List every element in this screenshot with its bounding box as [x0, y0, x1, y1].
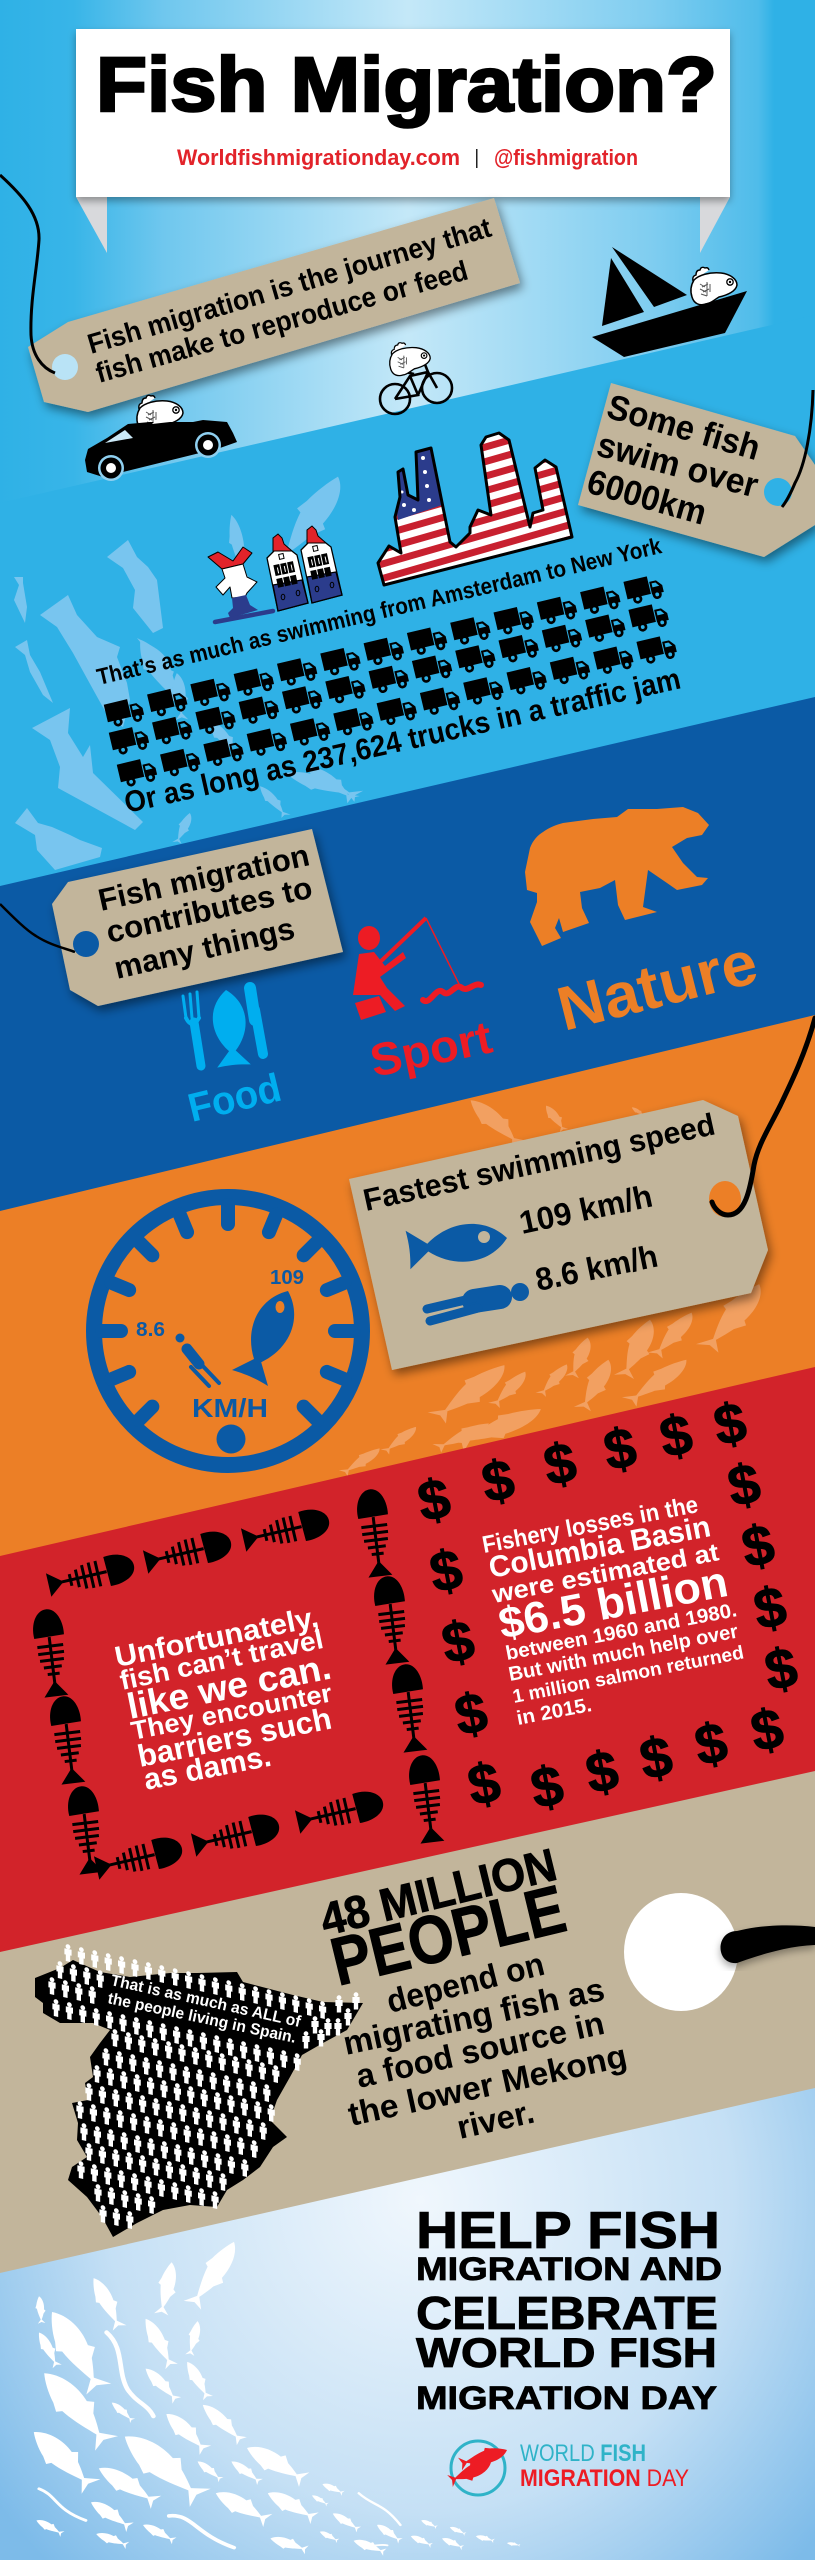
logo: World Fish Migration Day: WORLD FISH [520, 2440, 646, 2467]
text block: barriers such as dams: like we can. [123, 1646, 334, 1727]
dollar signs frame: $ [749, 1574, 791, 1641]
gauge value 8.6: 8.6 [136, 1319, 165, 1341]
icon: Amsterdam canal house 2 [301, 526, 342, 603]
icon: fish in sailboat [592, 247, 747, 357]
icon: food fork fish knife [183, 988, 263, 1068]
tag: what is fish migration: fish make to reproduce or feed [92, 255, 471, 389]
panel: dark blue band [0, 697, 815, 2560]
text block: 48 million people: river. [453, 2093, 538, 2146]
background fish school orange [338, 1095, 775, 1477]
title banner [76, 29, 730, 197]
text block: 48 million people: PEOPLE [324, 1871, 573, 2001]
dollar signs frame: $ [477, 1447, 519, 1514]
text block: 48 million people [315, 1838, 630, 2146]
tag: some fish swim over 6000km: Some fish [603, 387, 764, 468]
text block: Columbia Basin losses: between 1960 and 1980. [504, 1599, 739, 1665]
dollar signs frame: $ [599, 1415, 641, 1482]
text block: 48 million people: migrating fish as [340, 1970, 608, 2062]
map: Spain filled with people [35, 1943, 363, 2237]
background: sky gradient [0, 0, 815, 1000]
tag: fastest swimming speed: Fastest swimming speed [360, 1107, 718, 1218]
callout: as many as Spain: That is as much as ALL of [109, 1972, 303, 2031]
text block: barriers such as dams [112, 1602, 334, 1797]
icon: fish on bicycle [380, 343, 452, 414]
text block: 48 million people: a food source in [353, 2004, 608, 2095]
tag: contributes to many things [52, 829, 343, 1006]
text block: Columbia Basin losses: $6.5 billion [495, 1557, 732, 1649]
text: trucks in a traffic jam: Or as long as 237,624 trucks in a traffic jam [121, 663, 684, 820]
icon: New York skyline in US flag [378, 433, 572, 585]
dollar signs frame: $ [463, 1750, 505, 1817]
call to action: WORLD FISH [416, 2329, 717, 2376]
dollar signs frame [413, 1390, 802, 1820]
text block: Columbia Basin losses: in 2015. [515, 1694, 594, 1730]
icon: orange bear [525, 807, 709, 946]
tag hole with thick cord [624, 1893, 815, 2011]
white fish school [22, 2236, 521, 2557]
dollar signs frame: $ [413, 1466, 455, 1533]
chart: speedometer gauge [94, 1197, 362, 1465]
text block: Columbia Basin losses: 1 million salmon returned [511, 1642, 746, 1708]
tag: contributes to many things: contributes to [103, 870, 315, 950]
string: third tag [0, 904, 75, 952]
tag: what is fish migration [28, 198, 520, 412]
twitter handle: @fishmigration [494, 145, 638, 170]
dollar signs frame: $ [581, 1738, 623, 1805]
text block: 48 million people: depend on [383, 1945, 548, 2020]
string: first tag [0, 175, 55, 373]
text block: barriers such as dams: fish can’t travel [117, 1624, 326, 1696]
dollar signs frame: $ [655, 1402, 697, 1469]
dollar signs frame: $ [437, 1608, 479, 1675]
text block: 48 million people: the lower Mekong [345, 2037, 630, 2133]
icon: blue fish [406, 1219, 509, 1269]
dollar signs frame: $ [709, 1390, 751, 1457]
text block: barriers such as dams: They encounter [128, 1678, 334, 1746]
tag: some fish swim over 6000km [578, 383, 815, 557]
label: Nature: Nature [551, 928, 764, 1045]
text block: barriers such as dams: Unfortunately, [112, 1602, 321, 1674]
tag: contributes to many things: many things [111, 911, 298, 986]
gauge unit: KM/H [192, 1393, 268, 1423]
text block: barriers such as dams: as dams. [141, 1740, 274, 1797]
text block: Columbia Basin losses [480, 1491, 746, 1730]
dollar signs frame: $ [526, 1753, 568, 1820]
call to action [416, 2202, 722, 2416]
panel: red band [0, 1367, 815, 2560]
dollar signs frame: $ [690, 1710, 732, 1777]
call to action: HELP FISH [416, 2202, 720, 2260]
dollar signs frame: $ [737, 1512, 779, 1579]
icon: sport fisherman [353, 918, 481, 1020]
logo: World Fish Migration Day: MIGRATION DAY [520, 2465, 689, 2492]
icon: Amsterdam canal house [267, 534, 308, 611]
trucks traffic jam [104, 573, 678, 789]
text: Amsterdam to New York: That’s as much as swimming from Amsterdam to New York [94, 532, 664, 690]
callout: as many as Spain: the people living in Spain. [106, 1990, 298, 2047]
panel: tan band [0, 1771, 815, 2560]
title: Fish Migration? [96, 42, 717, 128]
panel: orange band [0, 1015, 815, 2560]
dollar signs frame: $ [760, 1635, 802, 1702]
tag: contributes to many things: Fish migration [95, 837, 312, 918]
tag: fastest swimming speed [349, 1100, 768, 1370]
string: second tag [782, 390, 813, 507]
text block: barriers such as dams: barriers such [134, 1701, 334, 1774]
gauge needle fish [232, 1283, 306, 1386]
tag: some fish swim over 6000km: 6000km [583, 462, 711, 533]
tag: fastest swimming speed: 8.6 km/h [532, 1238, 661, 1298]
text block: Columbia Basin losses: were estimated at [489, 1538, 722, 1609]
gauge needle person [176, 1334, 219, 1386]
icon: blue swimmer [427, 1283, 529, 1321]
call to action: MIGRATION DAY [416, 2380, 717, 2416]
call to action: MIGRATION AND [416, 2251, 722, 2287]
label: Food: Food [184, 1066, 285, 1131]
website link: Worldfishmigrationday.com [177, 145, 460, 170]
dollar signs frame: $ [635, 1724, 677, 1791]
tag: fastest swimming speed: 109 km/h [516, 1178, 656, 1241]
tag: what is fish migration: Fish migration is the journey that [84, 212, 495, 360]
tag: some fish swim over 6000km: swim over [593, 425, 763, 506]
logo: World Fish Migration Day [446, 2440, 689, 2495]
icon: fish in car [85, 395, 237, 481]
dollar signs frame: $ [723, 1451, 765, 1518]
dollar signs frame: $ [425, 1537, 467, 1604]
call to action: CELEBRATE [416, 2287, 718, 2339]
text block: 48 million people: 48 MILLION [315, 1838, 562, 1946]
dollar signs frame: $ [746, 1696, 788, 1763]
label: Sport: Sport [365, 1011, 496, 1087]
background: bottom light area [0, 2088, 815, 2560]
text block: Columbia Basin losses: Fishery losses in the [480, 1491, 700, 1559]
gauge value 109: 109 [270, 1267, 304, 1289]
people across the map [48, 1943, 360, 2229]
dollar signs frame: $ [539, 1430, 581, 1497]
background fish school [14, 472, 365, 870]
fish skeletons frame [31, 1487, 447, 1883]
dollar signs frame: $ [450, 1680, 492, 1747]
text block: Columbia Basin losses: Columbia Basin [486, 1510, 713, 1585]
title banner flaps [76, 197, 730, 253]
icon: Dutch windmill [208, 547, 273, 622]
text block: Columbia Basin losses: But with much help over [507, 1621, 740, 1686]
string: speed tag [712, 1018, 815, 1215]
